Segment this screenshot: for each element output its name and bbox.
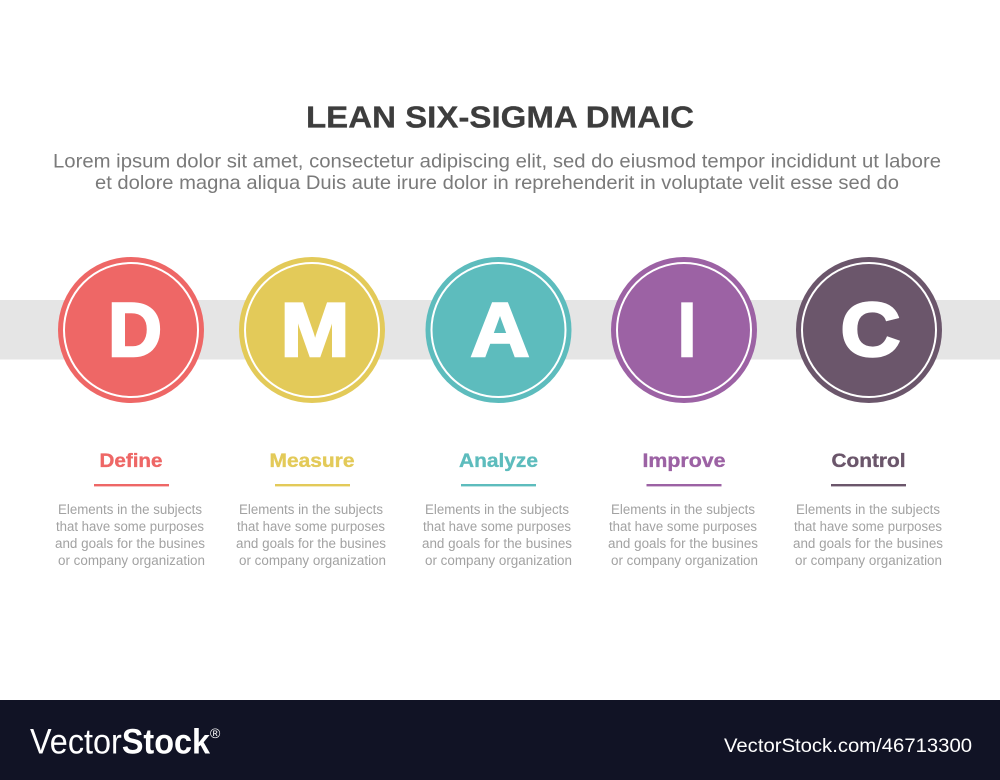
icon: circle I: I — [678, 288, 696, 373]
watermark footer bar: ® — [210, 725, 221, 741]
step: Measure — [236, 257, 386, 568]
logo: VectorStock: VectorStock — [30, 722, 210, 762]
step: Define — [55, 257, 205, 568]
heading: Define: Define — [100, 451, 162, 472]
description: Measure — [236, 502, 386, 568]
subtitle text — [53, 150, 941, 194]
description: Measure: and goals for the busines — [236, 536, 386, 551]
step: Improve — [608, 257, 758, 568]
description: Measure: that have some purposes — [237, 519, 385, 534]
description: Analyze: and goals for the busines — [422, 536, 572, 551]
icon: circle C: C — [840, 288, 900, 373]
description: Control: and goals for the busines — [793, 536, 943, 551]
description: Measure: or company organization — [239, 553, 386, 568]
description: Improve: and goals for the busines — [608, 536, 758, 551]
icon: circle I — [611, 257, 757, 403]
description: Analyze: or company organization — [425, 553, 572, 568]
watermark footer bar — [0, 700, 1000, 780]
description: Improve: Elements in the subjects — [611, 502, 755, 517]
icon: circle M: M — [280, 288, 350, 373]
icon: circle C — [796, 257, 942, 403]
description: Define: Elements in the subjects — [58, 502, 202, 517]
description: Control: that have some purposes — [794, 519, 942, 534]
description: Define: or company organization — [58, 553, 205, 568]
icon: circle D: D — [108, 288, 162, 373]
subtitle text: et dolore magna aliqua Duis aute irure dolor in reprehenderit in voluptate velit esse sed do — [95, 172, 899, 194]
grey horizontal band — [0, 300, 1000, 360]
description: Analyze: Elements in the subjects — [425, 502, 569, 517]
step: Analyze — [422, 257, 572, 568]
description: Improve: that have some purposes — [609, 519, 757, 534]
heading: Measure: Measure — [270, 451, 354, 472]
description: Control — [793, 502, 943, 568]
description: Improve: or company organization — [611, 553, 758, 568]
description: Define: and goals for the busines — [55, 536, 205, 551]
title: LEAN SIX-SIGMA DMAIC — [306, 100, 694, 134]
heading: Control: Control — [832, 451, 906, 472]
description: Analyze: that have some purposes — [423, 519, 571, 534]
description: Define — [55, 502, 205, 568]
description: Improve — [608, 502, 758, 568]
description: Control: Elements in the subjects — [796, 502, 940, 517]
step: Control — [793, 257, 943, 568]
heading: Improve: Improve — [642, 451, 726, 472]
icon: circle A — [426, 257, 572, 403]
icon: circle A: A — [470, 288, 530, 373]
icon: circle D — [58, 257, 204, 403]
description: Define: that have some purposes — [56, 519, 204, 534]
description: Analyze — [422, 502, 572, 568]
description: Control: or company organization — [795, 553, 942, 568]
footer id text: VectorStock.com/46713300 — [724, 736, 972, 757]
subtitle text: Lorem ipsum dolor sit amet, consectetur adipiscing elit, sed do eiusmod tempor incididunt ut labore — [53, 150, 941, 172]
heading: Analyze: Analyze — [459, 451, 538, 472]
description: Measure: Elements in the subjects — [239, 502, 383, 517]
icon: circle M — [239, 257, 385, 403]
